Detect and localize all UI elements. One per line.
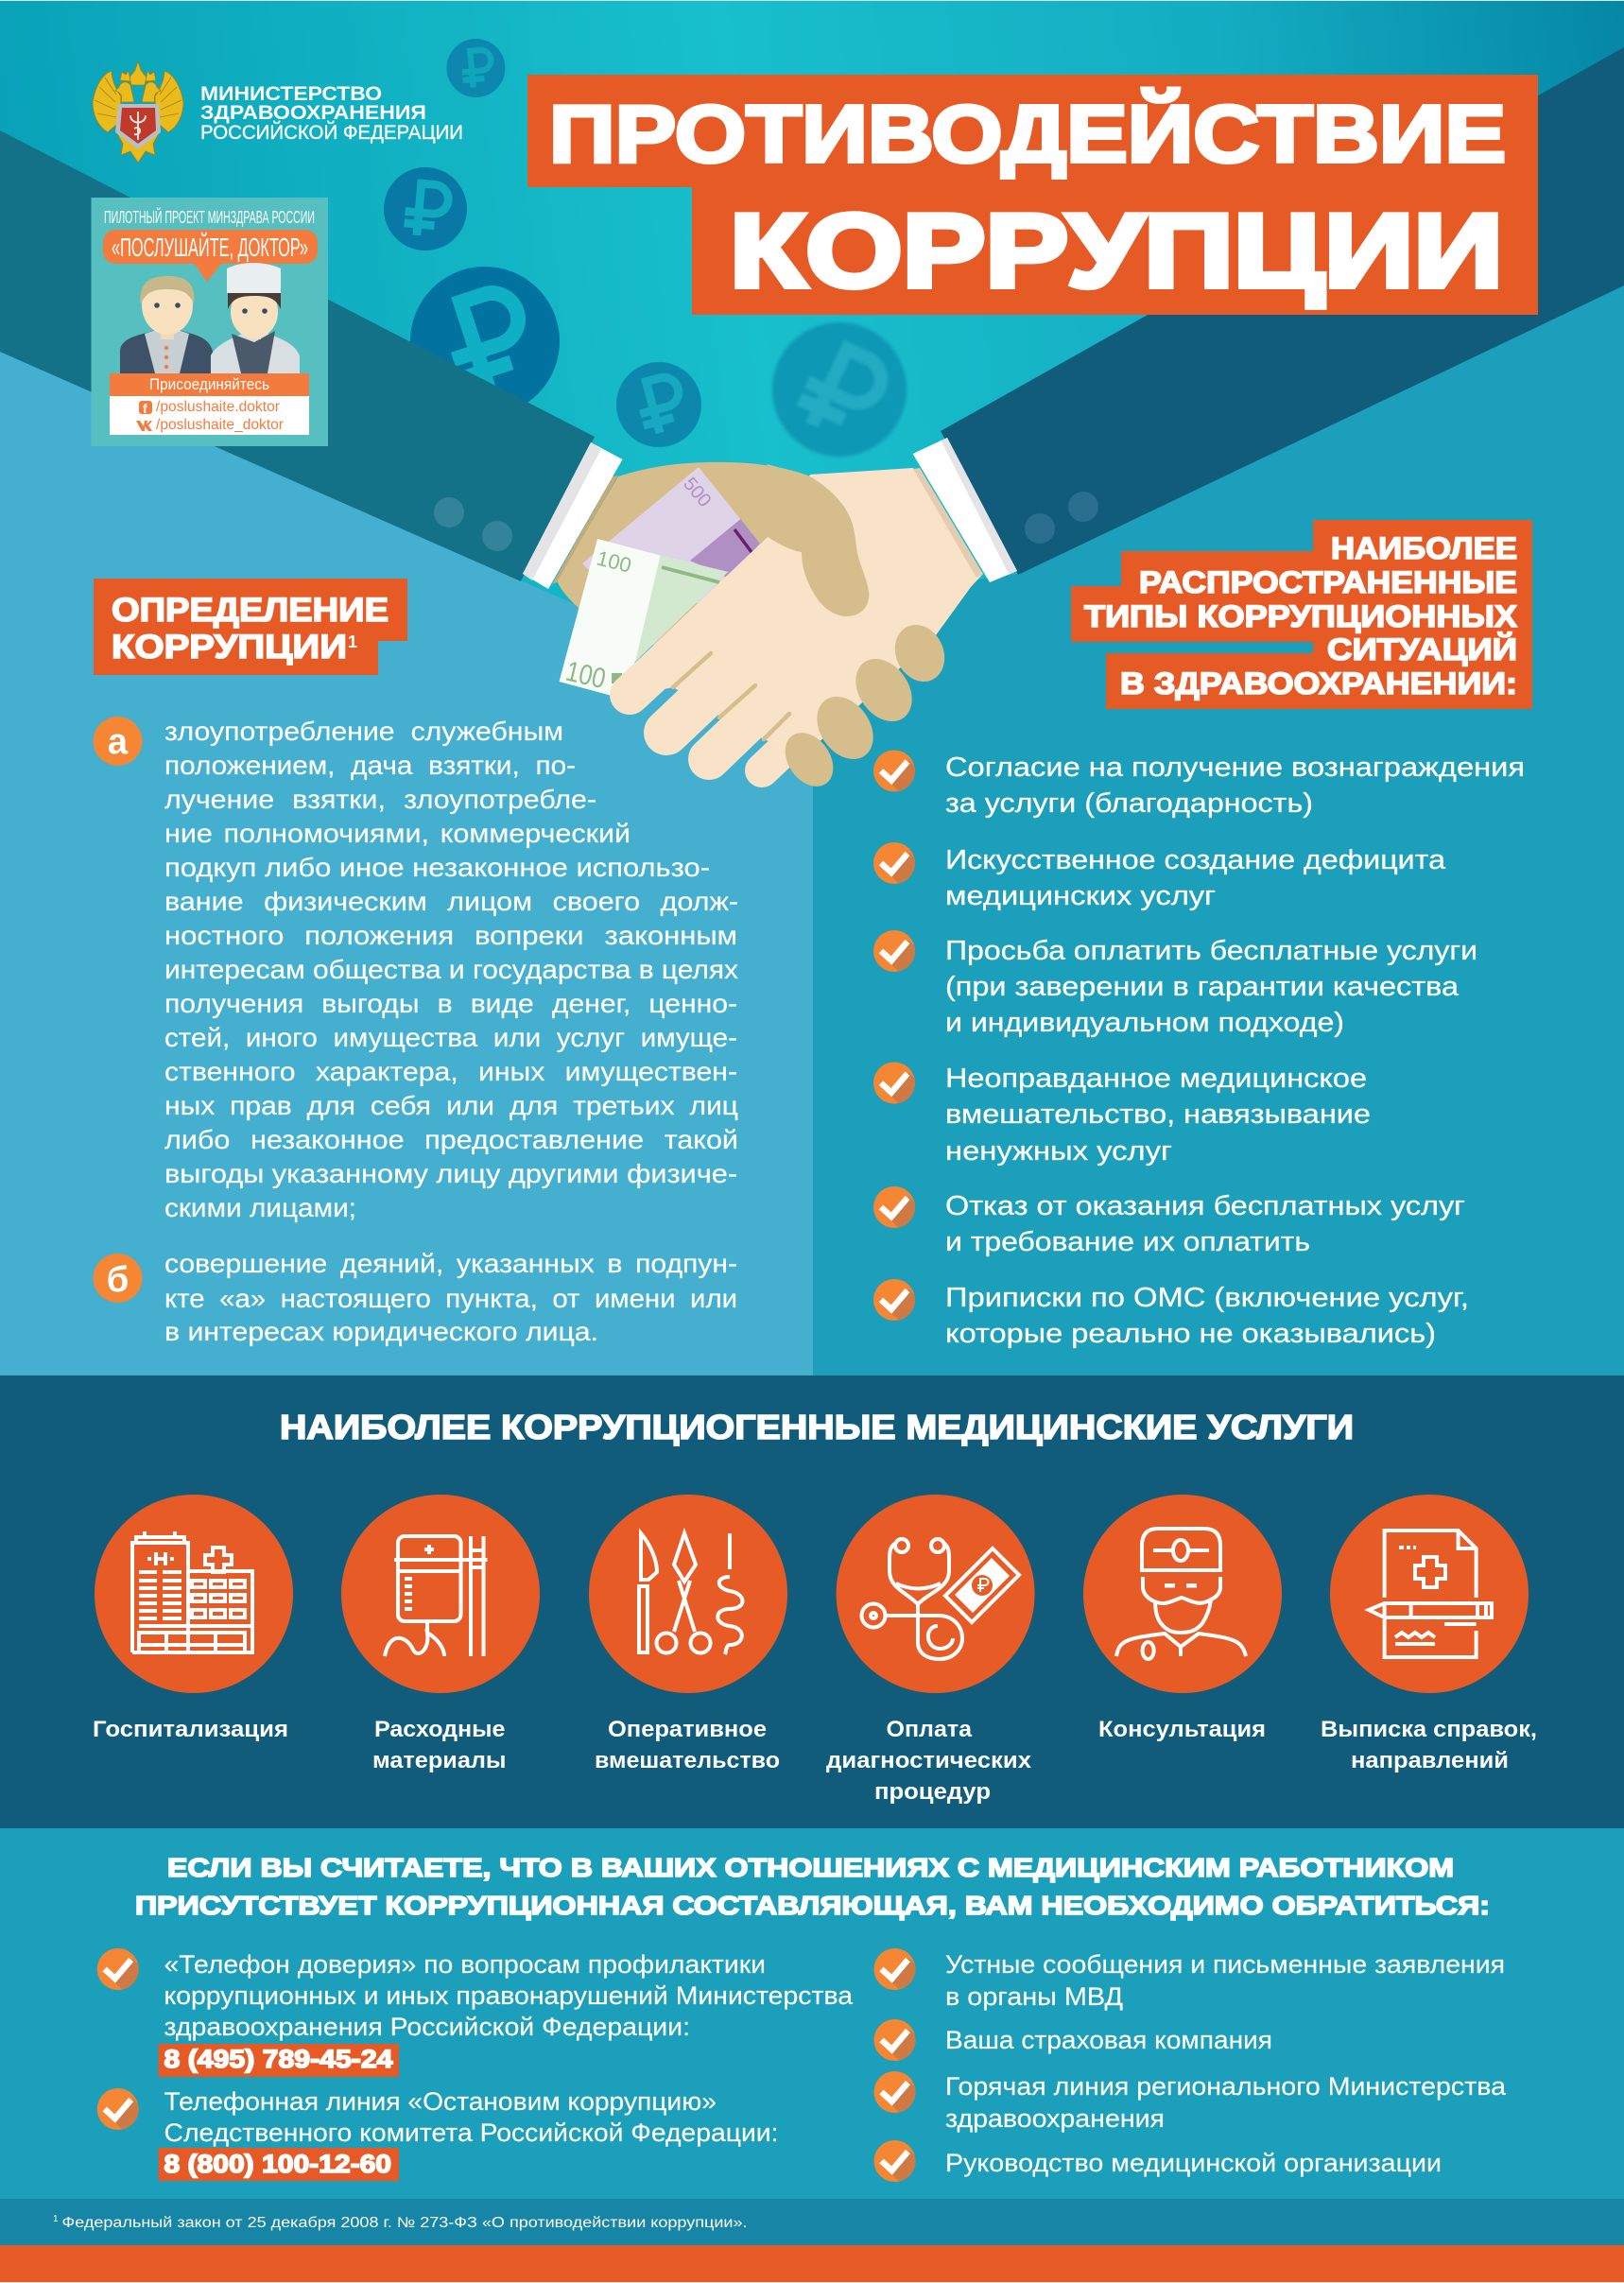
patient figure (120, 276, 214, 373)
heading: most common corruption situations: В ЗДРАВООХРАНЕНИИ: (1120, 666, 1517, 700)
left cuff (523, 442, 622, 589)
item 1 (873, 751, 1525, 819)
social links: /poslushaite.doktor (156, 399, 281, 415)
contact: ministry hotline: коррупционных и иных правонарушений Министерства (164, 1981, 854, 2010)
contact: management (873, 2140, 1442, 2191)
poster: pilot project "Послушайте, доктор" (91, 198, 328, 446)
logo: ministry name: ЗДРАВООХРАНЕНИЯ (200, 102, 426, 124)
right cuff (913, 438, 1017, 582)
text block: definition а: выгоды указанному лицу другими физиче- (164, 1159, 737, 1188)
background: top hairline (0, 0, 1624, 1)
item 2 (873, 842, 1446, 911)
text block: definition а: стей, иного имущества или услуг имуще- (164, 1023, 737, 1052)
footnote: 1 (53, 2214, 59, 2224)
logo: ministry name (200, 83, 463, 144)
logo: ministry name: РОССИЙСКОЙ ФЕДЕРАЦИИ (200, 121, 463, 144)
item 4 (873, 1063, 1371, 1167)
logo: ministry name: МИНИСТЕРСТВО (200, 83, 382, 105)
title: ПРОТИВОДЕЙСТВИЕ (549, 88, 1506, 180)
icon: hospital (95, 1495, 293, 1693)
badge: б (93, 1254, 142, 1303)
heading: services: НАИБОЛЕЕ КОРРУПЦИОГЕННЫЕ МЕДИЦИНСКИЕ УСЛУГИ (280, 1408, 1354, 1446)
heading: most common corruption situations: НАИБОЛЕЕ (1331, 531, 1517, 565)
icon: IV bag (341, 1495, 540, 1693)
item 6 (873, 1279, 1469, 1349)
contact: ministry hotline (97, 1948, 854, 2077)
item 4: ненужных услуг (945, 1136, 1172, 1167)
banknote 100 (560, 539, 728, 696)
contact: police: в органы МВД (945, 1982, 1123, 2011)
panel: corruption-prone medical services (0, 1375, 1624, 1828)
join bar (110, 373, 309, 396)
coin: medium ruble (380, 164, 471, 254)
item 3: (при заверении в гарантии качества (945, 972, 1460, 1002)
heading: most common corruption situations (1071, 520, 1532, 709)
item 5: и требование их оплатить (945, 1227, 1310, 1257)
heading: most common corruption situations: РАСПРОСТРАНЕННЫЕ (1139, 565, 1517, 599)
label: consultation: Консультация (1098, 1717, 1266, 1742)
contact: police (873, 1948, 1505, 2011)
contact: insurer (873, 2019, 1272, 2070)
label: diagnostic payment: диагностических (826, 1748, 1032, 1773)
eagle tail and feet (115, 130, 161, 163)
social links (110, 396, 309, 435)
bottom orange bar (0, 2245, 1624, 2282)
badge: а: а (108, 722, 129, 762)
left hand back (557, 462, 869, 662)
heading: where to report: ЕСЛИ ВЫ СЧИТАЕТЕ, ЧТО В ВАШИХ ОТНОШЕНИЯХ С МЕДИЦИНСКИМ РАБОТНИКОМ (167, 1853, 1454, 1882)
finger gaps (673, 653, 789, 739)
label: hospitalization: Госпитализация (93, 1717, 288, 1742)
poster: pilot project "Послушайте, доктор": ПИЛОТНЫЙ ПРОЕКТ МИНЗДРАВА РОССИИ (104, 207, 315, 227)
left sleeve (0, 130, 595, 581)
speech bubble (103, 230, 318, 282)
social links: f (143, 401, 147, 416)
item 3: и индивидуальном подходе) (945, 1008, 1344, 1038)
text block: definition б (164, 1249, 737, 1346)
label: consumables: материалы (372, 1748, 507, 1773)
banknote 100: 100 (595, 546, 633, 578)
icon: medical certificate (1330, 1495, 1529, 1693)
item 2: Искусственное создание дефицита (945, 845, 1446, 875)
text block: definition а: вание физическим лицом своего долж- (164, 887, 738, 916)
banknote 500 (582, 467, 760, 605)
title: КОРРУПЦИИ (730, 193, 1503, 309)
text block: definition б: кте «а» настоящего пункта, от имени или (164, 1284, 737, 1313)
label: certificates: направлений (1351, 1748, 1509, 1773)
label: surgery: Оперативное (608, 1717, 767, 1742)
badge: б: б (107, 1260, 129, 1300)
contact: regional hotline (873, 2071, 1507, 2133)
text block: definition а: скими лицами; (164, 1193, 356, 1222)
right hand (618, 468, 983, 770)
contact: investigative committee hotline: Телефонная линия «Остановим коррупцию» (164, 2087, 717, 2116)
list: corruption situations (873, 751, 1525, 1349)
coin: large ruble (390, 247, 579, 436)
right wrist shade (913, 468, 983, 578)
doctor figure (211, 263, 300, 373)
label: diagnostic payment (826, 1717, 1032, 1805)
text block: definition б: в интересах юридического лица. (164, 1317, 598, 1346)
phone number 2: 8 (800) 100-12-60 (164, 2150, 391, 2178)
contact: ministry hotline: здравоохранения Российской Федерации: (164, 2013, 690, 2041)
text block: definition а: лучение взятки, злоупотребле- (164, 785, 596, 814)
contact: insurer: Ваша страховая компания (945, 2026, 1272, 2054)
icon: surgical instruments (589, 1495, 787, 1693)
item 3: Просьба оплатить бесплатные услуги (945, 936, 1477, 966)
banknote 100: 100 (562, 656, 609, 695)
left hand fingers (775, 616, 954, 796)
contact: investigative committee hotline (97, 2087, 778, 2181)
icon: doctor (1083, 1495, 1282, 1693)
heading: where to report: ПРИСУТСТВУЕТ КОРРУПЦИОННАЯ СОСТАВЛЯЮЩАЯ, ВАМ НЕОБХОДИМО ОБРАТИТЬСЯ: (135, 1891, 1490, 1920)
join bar: Присоединяйтесь (149, 375, 269, 393)
contact: regional hotline: здравоохранения (945, 2104, 1165, 2133)
phone number 1: 8 (495) 789-45-24 (164, 2045, 393, 2073)
item 6: Приписки по ОМС (включение услуг, (945, 1283, 1469, 1313)
coin: blurred ruble (751, 301, 928, 478)
logo: ministry emblem (93, 61, 183, 163)
footnote (0, 2199, 1624, 2245)
left thumb (737, 464, 869, 616)
heading: definition of corruption: КОРРУПЦИИ (112, 629, 347, 666)
contact: regional hotline: Горячая линия регионального Министерства (945, 2072, 1507, 2101)
contact: police: Устные сообщения и письменные заявления (945, 1950, 1505, 1979)
contact: ministry hotline: «Телефон доверия» по вопросам профилактики (164, 1950, 766, 1979)
item 1: за услуги (благодарность) (945, 788, 1313, 819)
text block: definition а: подкуп либо иное незаконное использо- (164, 853, 710, 882)
item 4: Неоправданное медицинское (945, 1064, 1367, 1094)
heading: definition of corruption: 1 (348, 632, 357, 651)
eagle heads and crowns (115, 61, 161, 102)
text block: definition а: ностного положения вопреки законным (164, 921, 737, 950)
sleeve buttons (434, 492, 1098, 551)
panel: left light blue background (0, 352, 813, 1375)
text block: definition а: интересам общества и государства в целях (164, 955, 738, 984)
left wrist shade (552, 476, 618, 584)
footnote: Федеральный закон от 25 декабря 2008 г. № 273-ФЗ «О противодействии коррупции». (62, 2215, 747, 2231)
title (527, 75, 1538, 315)
heading: where to report (135, 1853, 1490, 1920)
background: top gradient (0, 0, 1624, 945)
contact: management: Руководство медицинской организации (945, 2149, 1442, 2177)
heading: definition of corruption (94, 579, 407, 675)
item 4: вмешательство, навязывание (945, 1099, 1371, 1130)
label: surgery: вмешательство (595, 1748, 780, 1773)
icon: stethoscope and banknote (837, 1495, 1035, 1693)
coin: ruble centre (607, 353, 711, 457)
heading: most common corruption situations: СИТУАЦИЙ (1327, 632, 1517, 666)
text block: definition а: получения выгоды в виде денег, ценно- (164, 989, 737, 1018)
label: consumables: Расходные (374, 1717, 505, 1742)
eagle wings (93, 71, 183, 132)
text block: definition а (164, 717, 738, 1222)
item 6: которые реально не оказывались) (945, 1319, 1436, 1349)
label: diagnostic payment: Оплата (887, 1717, 973, 1742)
text block: definition а: злоупотребление служебным (164, 717, 563, 746)
speech bubble: «ПОСЛУШАЙТЕ, ДОКТОР» (112, 233, 308, 262)
item 2: медицинских услуг (945, 881, 1216, 911)
social links: /poslushaite_doktor (156, 417, 285, 433)
banknote 500: 500 (679, 474, 715, 511)
right sleeve (941, 47, 1624, 575)
item 3 (873, 930, 1477, 1038)
item 5 (873, 1186, 1465, 1257)
text block: definition а: ние полномочиями, коммерческий (164, 819, 631, 848)
text block: definition а: либо незаконное предоставление такой (164, 1125, 738, 1154)
label: diagnostic payment: процедур (874, 1779, 991, 1805)
bottom hairline (0, 2282, 1624, 2283)
item 1: Согласие на получение вознаграждения (945, 752, 1525, 783)
heading: definition of corruption: ОПРЕДЕЛЕНИЕ (112, 592, 389, 629)
shield (115, 104, 161, 149)
heading: most common corruption situations: ТИПЫ КОРРУПЦИОННЫХ (1084, 599, 1518, 633)
coin: small ruble top (444, 36, 508, 100)
badge: а (93, 717, 142, 766)
item 5: Отказ от оказания бесплатных услуг (945, 1191, 1465, 1221)
panel: where to report (0, 1828, 1624, 2199)
label: consumables (372, 1717, 507, 1773)
text block: definition а: положением, дача взятки, по- (164, 751, 576, 780)
contact: investigative committee hotline: Следственного комитета Российской Федерации: (164, 2119, 779, 2147)
handshake illustration (0, 47, 1624, 796)
label: surgery (595, 1717, 780, 1773)
label: certificates: Выписка справок, (1321, 1717, 1537, 1742)
text block: definition б: совершение деяний, указанных в подпун- (164, 1249, 737, 1278)
panel: right blue background (813, 285, 1624, 1375)
text block: definition а: ных прав для себя или для третьих лиц (164, 1091, 738, 1120)
text block: definition а: ственного характера, иных имуществен- (164, 1057, 737, 1086)
label: certificates (1321, 1717, 1537, 1773)
